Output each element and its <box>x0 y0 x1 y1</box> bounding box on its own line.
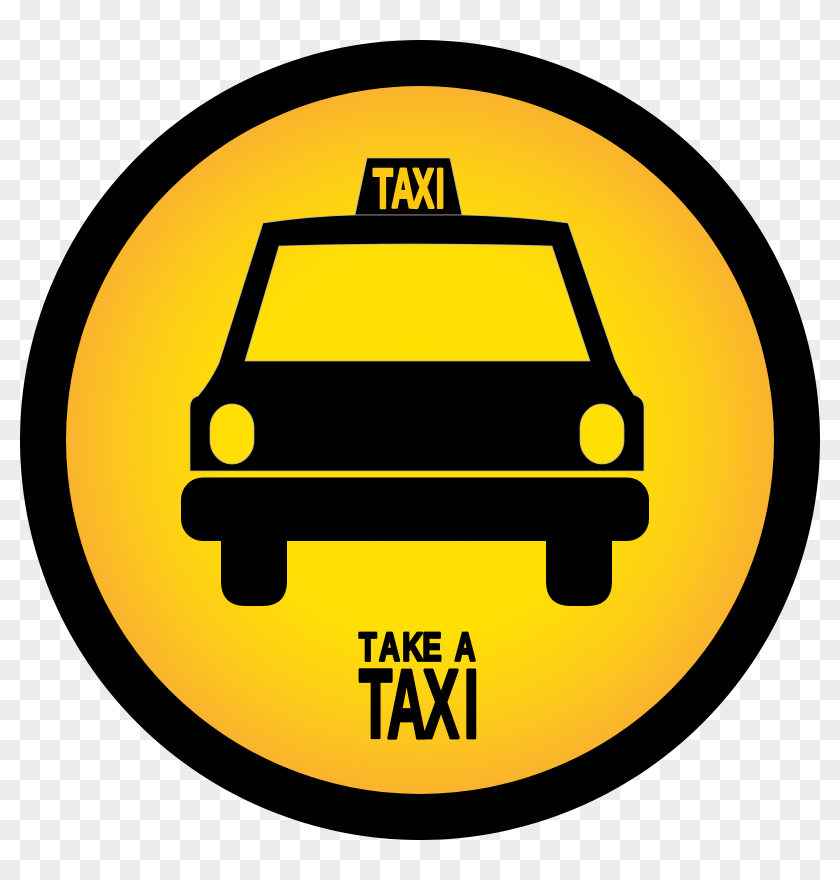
caption: take a: TAKE A <box>359 625 476 670</box>
left headlight <box>210 404 254 464</box>
left wheel <box>221 530 287 606</box>
right wheel <box>546 530 612 606</box>
right headlight <box>580 404 624 464</box>
icon: taxi car front view <box>181 157 649 606</box>
caption: taxi: TAXI <box>359 650 479 758</box>
windscreen <box>245 244 590 361</box>
bumper <box>181 478 649 541</box>
car body with windscreen <box>190 215 644 471</box>
sign label: TAXI <box>373 157 445 220</box>
roof sign <box>355 158 462 215</box>
